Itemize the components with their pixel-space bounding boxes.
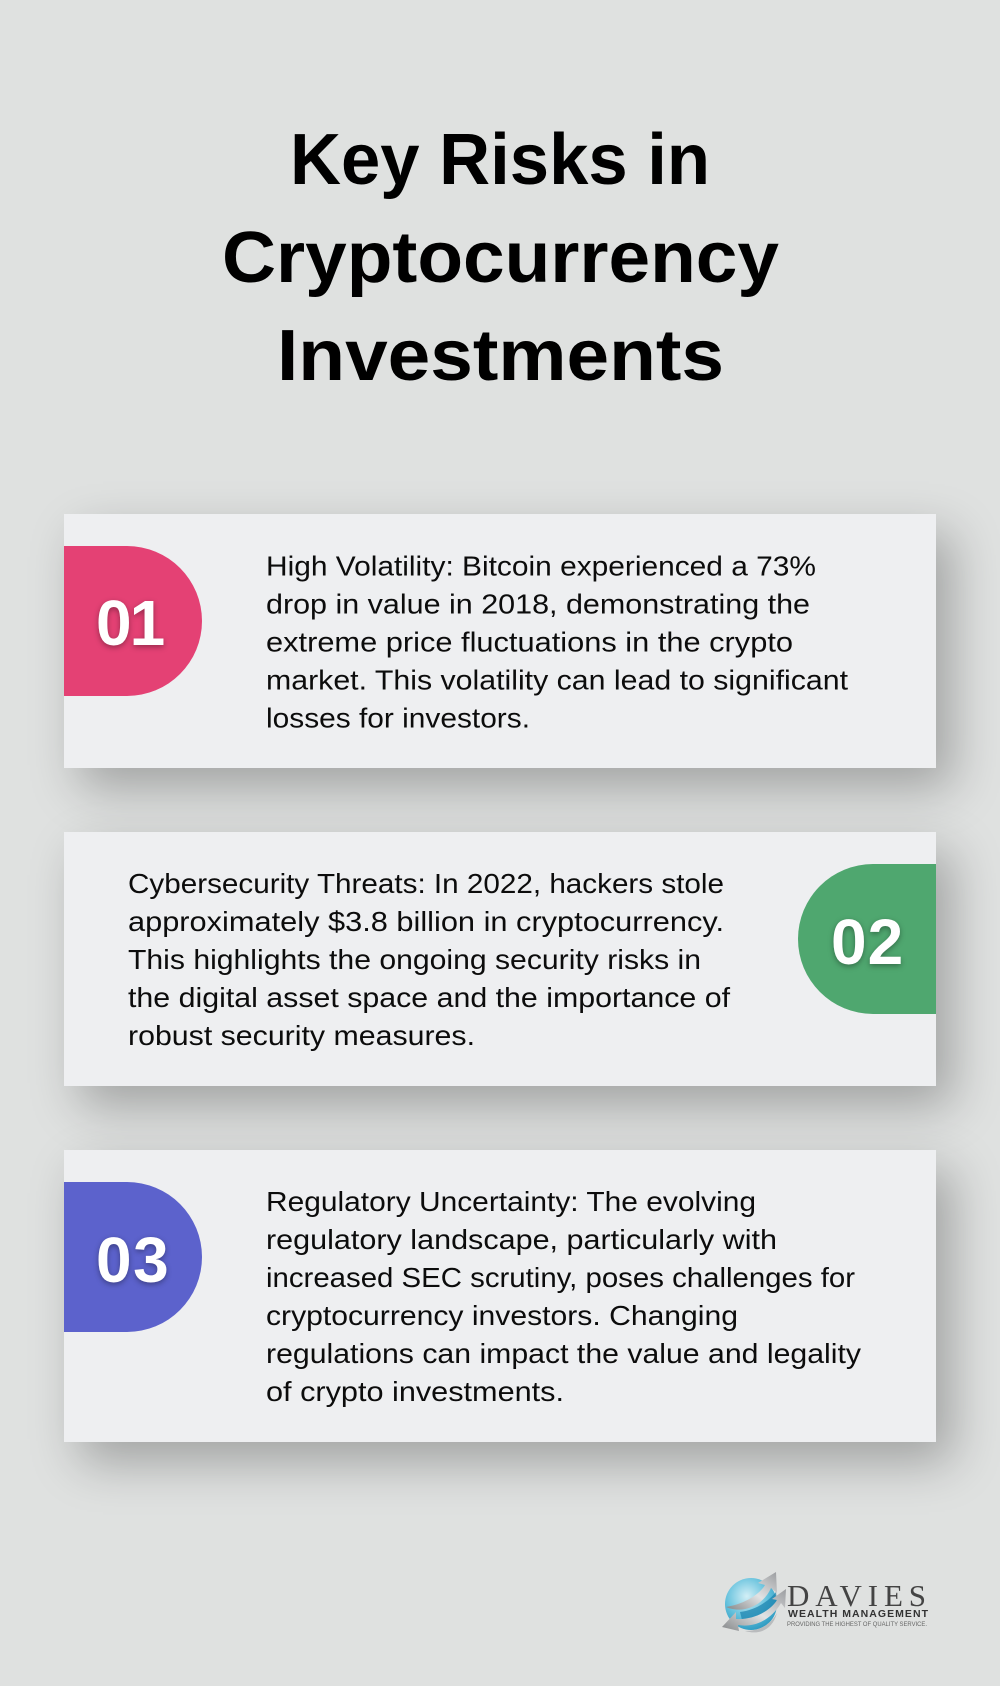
- number 01: 01: [96, 587, 163, 659]
- number 03: 03: [96, 1224, 170, 1296]
- text: cybersecurity threats: the digital asset space and the importance of: [128, 982, 730, 1013]
- panel: card 2 cybersecurity threats: [64, 832, 936, 1086]
- text: regulatory uncertainty: [266, 1186, 861, 1407]
- text: cybersecurity threats: Cybersecurity Threats: In 2022, hackers stole: [128, 868, 724, 899]
- text: high volatility: extreme price fluctuations in the crypto: [266, 626, 793, 657]
- text: cybersecurity threats: robust security measures.: [128, 1020, 475, 1051]
- text: cybersecurity threats: [128, 868, 730, 1051]
- logo wordmark: PROVIDING THE HIGHEST OF QUALITY SERVICE.: [787, 1621, 927, 1628]
- badge 02: [798, 864, 936, 1014]
- text: regulatory uncertainty: regulatory landscape, particularly with: [266, 1224, 777, 1255]
- logo wordmark: [787, 1578, 929, 1628]
- logo wordmark: WEALTH MANAGEMENT: [788, 1608, 929, 1620]
- title: Investments: [277, 316, 724, 396]
- title: [222, 120, 779, 396]
- title: Key Risks in: [290, 120, 710, 200]
- text: regulatory uncertainty: regulations can impact the value and legality: [266, 1338, 861, 1369]
- text: cybersecurity threats: This highlights the ongoing security risks in: [128, 944, 701, 975]
- logo wordmark: DAVIES: [787, 1578, 926, 1613]
- text: high volatility: drop in value in 2018, demonstrating the: [266, 588, 810, 619]
- text: cybersecurity threats: approximately $3.8 billion in cryptocurrency.: [128, 906, 724, 937]
- logo: Davies Wealth Management: [722, 1572, 929, 1632]
- badge 03: [64, 1182, 202, 1332]
- badge 01: [64, 546, 202, 696]
- text: high volatility: losses for investors.: [266, 702, 530, 733]
- text: regulatory uncertainty: increased SEC scrutiny, poses challenges for: [266, 1262, 855, 1293]
- text: regulatory uncertainty: of crypto investments.: [266, 1376, 564, 1407]
- text: regulatory uncertainty: Regulatory Uncertainty: The evolving: [266, 1186, 756, 1217]
- title: Cryptocurrency: [222, 218, 779, 298]
- text: high volatility: High Volatility: Bitcoin experienced a 73%: [266, 550, 816, 581]
- number 02: 02: [831, 906, 904, 978]
- text: high volatility: market. This volatility can lead to significant: [266, 664, 848, 695]
- panel: card 1 high volatility: [64, 514, 936, 768]
- panel: card 3 regulatory uncertainty: [64, 1150, 936, 1442]
- text: regulatory uncertainty: cryptocurrency investors. Changing: [266, 1300, 738, 1331]
- icon: globe with swooshes: [722, 1572, 786, 1632]
- text: high volatility: [266, 550, 848, 733]
